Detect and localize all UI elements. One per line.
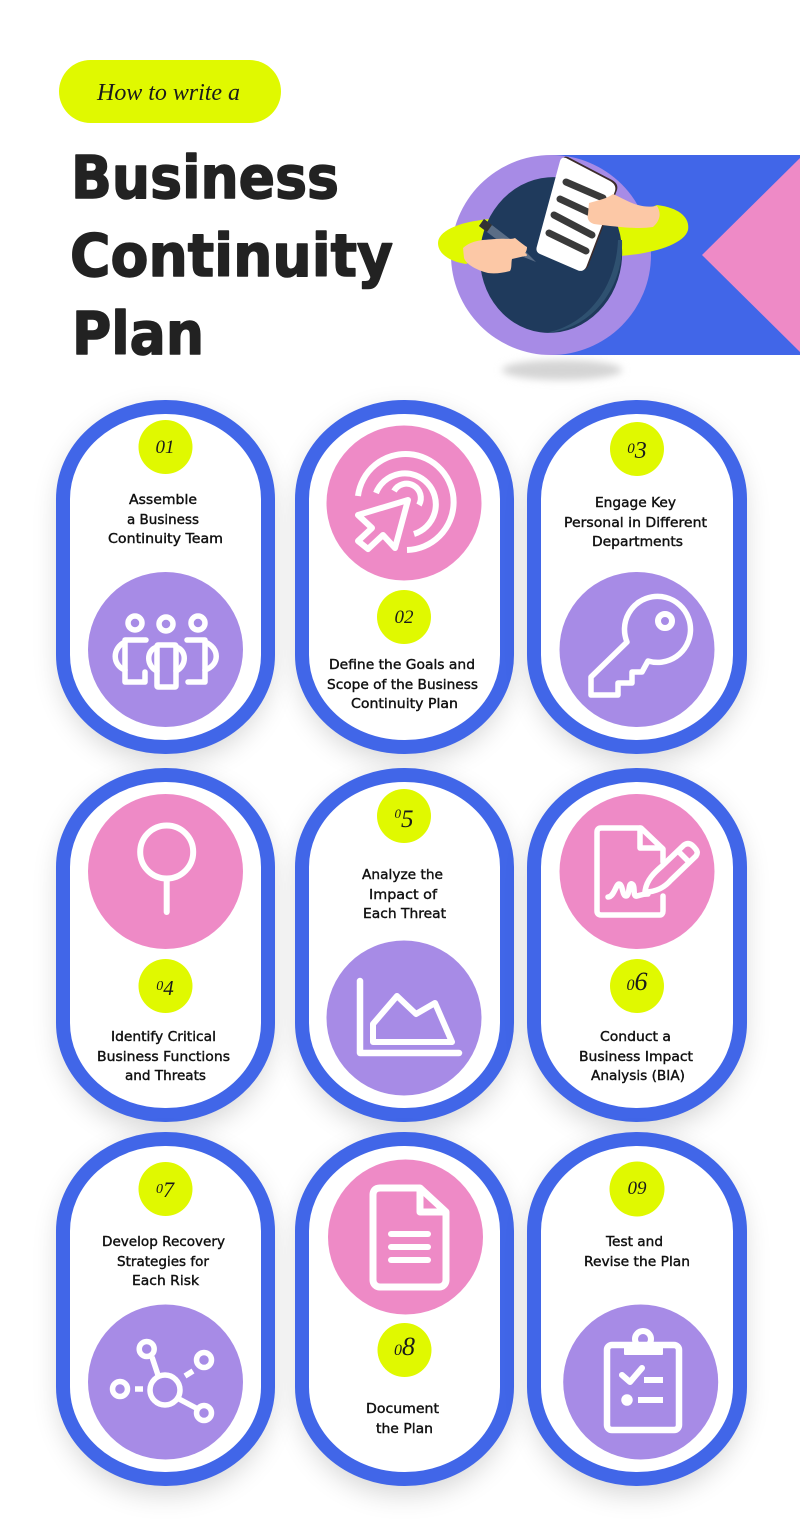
number badge 03: 0 [627,441,635,457]
step text: and Threats [125,1068,206,1084]
document [536,157,617,271]
number badge 08: 08 [394,1332,415,1361]
card ring [63,1139,268,1479]
card shadow [299,412,510,760]
step text: Assemble [129,492,197,508]
number badge 05: 0 [394,806,402,821]
step text: Impact of [369,887,438,903]
number badge 04 [138,959,192,1013]
number badge 01: 01 [156,437,174,458]
title: Business [71,143,339,212]
step text: Identify Critical [111,1029,216,1045]
step text: Analyze the [362,867,443,883]
step text: Continuity Plan [351,696,458,712]
step text [362,867,446,922]
number badge 04: 4 [163,976,174,1000]
number badge 06: 06 [626,967,648,996]
icon: signed document [560,794,714,949]
purple disc [451,155,651,355]
card ring [63,407,268,747]
step text: Personal in Different [564,515,707,531]
step text [584,1234,690,1270]
number badge 09 [610,1162,664,1216]
card shadow [531,1144,743,1493]
hero illustration [438,155,800,380]
pill: how to write a: How to write a [96,80,240,106]
step text: the Plan [376,1421,433,1437]
step text: Each Risk [132,1273,199,1289]
icon: magnifier pin [88,794,243,949]
title [70,143,393,368]
hero shadow [502,360,622,380]
icon: team [88,572,243,727]
card 02 [299,407,510,760]
step text: a Business [127,512,199,528]
card shadow [60,780,271,1129]
title: Continuity [70,221,393,290]
card 05 [299,775,510,1129]
card shadow [60,1144,271,1493]
pink triangle [702,158,800,352]
card ring [302,407,507,747]
number badge 04: 0 [156,979,163,994]
card shadow [60,412,271,760]
right arm [600,205,688,256]
step text: Develop Recovery [102,1234,225,1250]
step text: Test and [605,1234,663,1250]
dark disc [470,168,632,342]
card ring [302,775,507,1115]
card 07 [60,1139,271,1493]
card ring [302,1139,507,1479]
icon: target cursor [326,426,482,580]
step text [366,1401,439,1437]
step text: Business Functions [97,1049,230,1065]
step text [102,1234,225,1289]
number badge 08 [378,1323,432,1377]
number badge 09: 09 [628,1178,647,1199]
number badge 07: 0 [156,1182,163,1197]
number badge 02: 02 [394,607,414,628]
number badge 07: 7 [163,1177,175,1202]
card ring [534,775,740,1115]
card shadow [299,780,510,1129]
step text: Each Threat [363,906,446,922]
step text [97,1029,230,1084]
step text: Define the Goals and [329,657,475,673]
pill: how to write a [59,60,281,123]
card 01 [60,407,271,760]
step text: Conduct a [600,1029,671,1045]
card shadow [299,1144,510,1493]
blue banner [551,155,800,355]
title: Plan [72,299,204,368]
step text: Scope of the Business [327,677,478,693]
card ring [63,775,268,1115]
right hand [588,194,660,228]
icon: network [88,1304,243,1460]
card ring [534,1139,740,1479]
card 06 [531,775,743,1129]
step text: Analysis (BIA) [591,1068,685,1084]
step text [108,492,223,547]
card 03 [531,407,743,760]
number badge 03: 3 [634,438,647,464]
card shadow [531,412,743,760]
card ring [534,407,740,747]
card 09 [531,1139,743,1493]
left arm [438,219,495,264]
step text [579,1029,693,1084]
step text: Document [366,1401,439,1417]
number badge 02 [377,590,431,644]
step text: Departments [592,534,683,550]
step text: Strategies for [117,1254,209,1270]
icon: document [328,1160,483,1314]
number badge 05: 5 [401,806,414,833]
step text: Revise the Plan [584,1254,690,1270]
icon: area chart [326,940,482,1096]
number badge 01 [138,420,192,474]
step text: Business Impact [579,1049,693,1065]
number badge 07 [138,1162,192,1216]
step text: Continuity Team [108,531,223,547]
icon: checklist [563,1304,718,1460]
pen [479,219,536,262]
step text [327,657,478,712]
step text: Engage Key [595,495,676,511]
card 08 [299,1139,510,1493]
number badge 03 [610,422,664,476]
card 04 [60,775,271,1129]
number badge 06 [610,959,664,1013]
left hand [463,238,527,273]
number badge 05 [377,789,431,843]
card shadow [531,780,743,1129]
icon: key [560,572,714,727]
step text [564,495,707,550]
